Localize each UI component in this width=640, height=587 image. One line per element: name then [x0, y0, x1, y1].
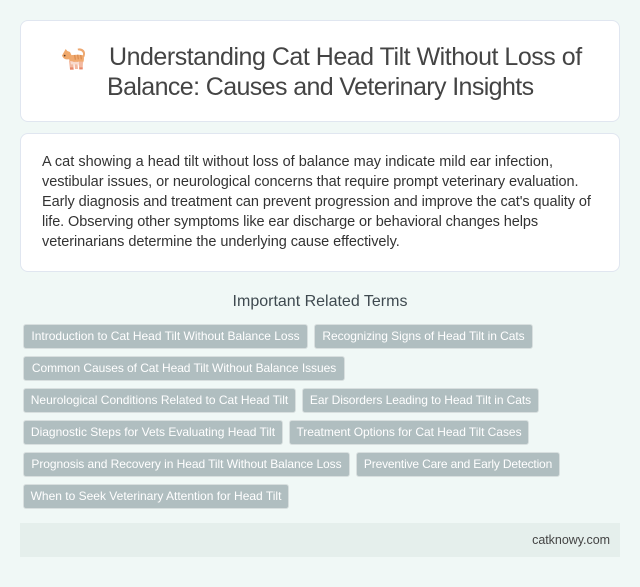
tag: When to Seek Veterinary Attention for Head Tilt — [31, 489, 281, 503]
tag — [23, 324, 308, 349]
icon: cat — [62, 48, 85, 70]
header panel — [20, 20, 620, 122]
title — [107, 43, 582, 101]
tag — [289, 420, 529, 445]
summary text: vestibular issues, or neurological concerns that require prompt veterinary evaluation. — [42, 174, 578, 190]
title: Understanding Cat Head Tilt Without Loss of — [109, 43, 582, 71]
title: Balance: Causes and Veterinary Insights — [107, 73, 533, 101]
related terms heading: Important Related Terms — [233, 293, 407, 310]
tag — [356, 452, 560, 477]
tag — [23, 356, 345, 381]
tag — [23, 452, 350, 477]
tag — [23, 388, 296, 413]
related terms tags — [23, 324, 560, 509]
summary text: A cat showing a head tilt without loss of balance may indicate mild ear infection, — [42, 154, 553, 170]
tag — [23, 484, 289, 509]
tag — [314, 324, 533, 349]
tag: Common Causes of Cat Head Tilt Without Balance Issues — [32, 361, 336, 375]
tag — [302, 388, 539, 413]
tag: Introduction to Cat Head Tilt Without Balance Loss — [31, 329, 300, 343]
footer bar — [20, 523, 620, 557]
summary panel — [20, 133, 620, 272]
tag: Neurological Conditions Related to Cat Head Tilt — [31, 393, 288, 407]
summary text — [42, 154, 591, 250]
footer source: catknowy.com — [532, 533, 610, 547]
tag: Diagnostic Steps for Vets Evaluating Head Tilt — [31, 425, 275, 439]
summary text: life. Observing other symptoms like ear discharge or behavioral changes helps — [42, 214, 538, 230]
summary text: veterinarians determine the underlying cause effectively. — [42, 234, 400, 250]
tag: Ear Disorders Leading to Head Tilt in Cats — [310, 393, 531, 407]
tag: Treatment Options for Cat Head Tilt Cases — [296, 425, 522, 439]
tag: Prognosis and Recovery in Head Tilt Without Balance Loss — [31, 457, 342, 471]
tag — [23, 420, 283, 445]
summary text: Early diagnosis and treatment can prevent progression and improve the cat's quality of — [42, 194, 591, 210]
tag: Preventive Care and Early Detection — [364, 457, 552, 471]
tag: Recognizing Signs of Head Tilt in Cats — [322, 329, 525, 343]
